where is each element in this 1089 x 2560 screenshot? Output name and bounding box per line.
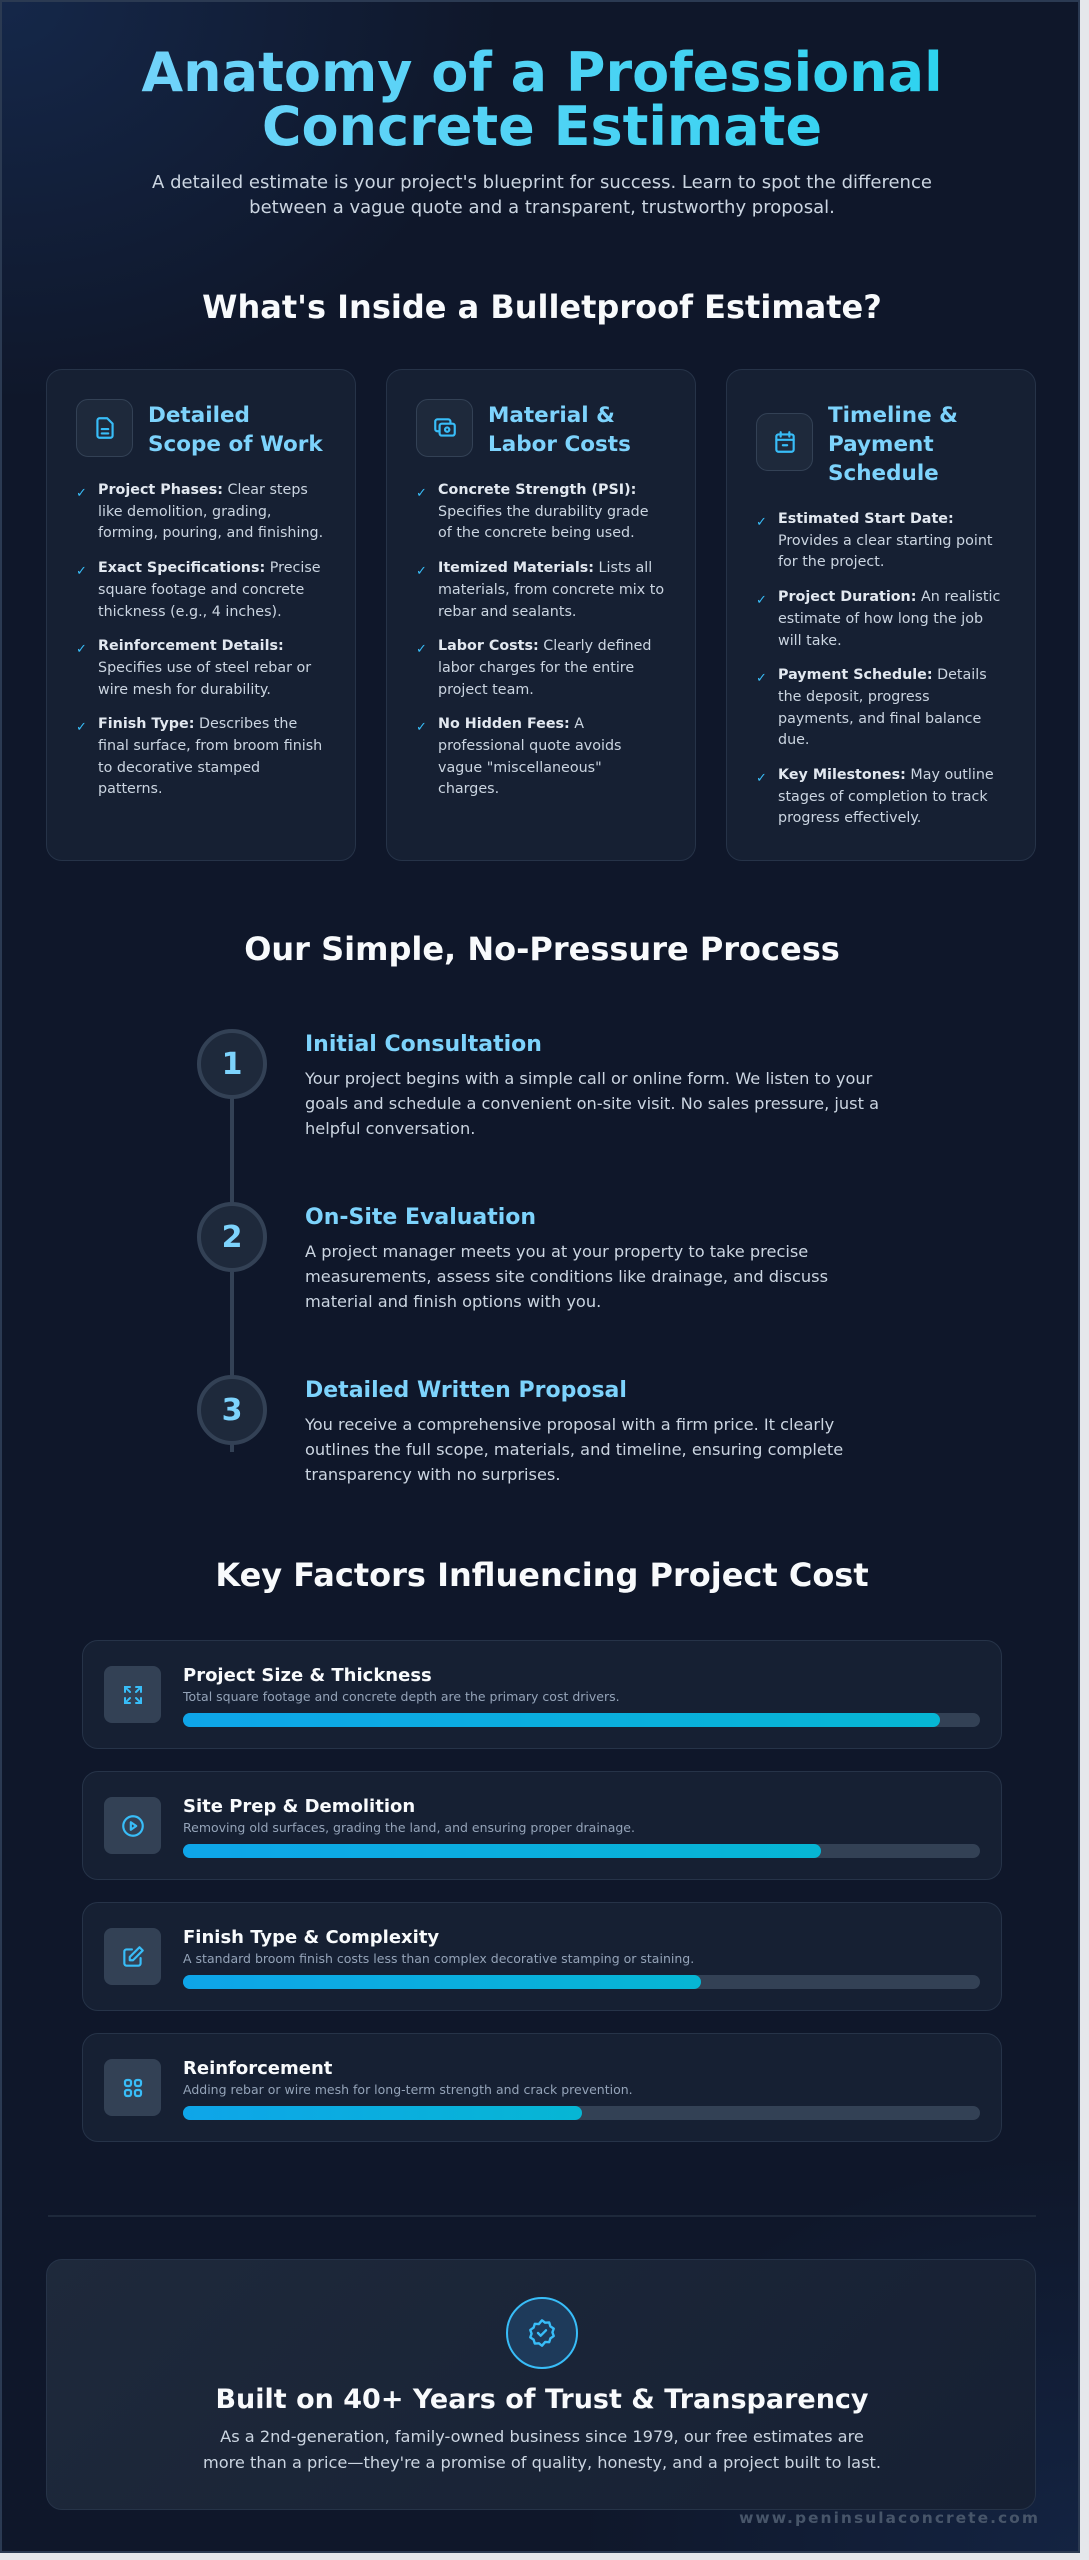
card title: Timeline & — [828, 403, 958, 428]
circle 1: 1 — [222, 1046, 242, 1082]
icon: document — [76, 399, 133, 457]
step 1 — [197, 1029, 879, 1138]
card title: Schedule — [828, 461, 939, 486]
factor: finish: Finish Type & Complexity — [183, 1927, 439, 1948]
callout title: Built on 40+ Years of Trust & Transparency — [215, 2384, 869, 2415]
card title: Labor Costs — [488, 432, 631, 457]
circle 2: 2 — [222, 1220, 242, 1254]
step 1 text: Initial Consultation — [305, 1032, 542, 1057]
title: Anatomy of a Professional — [141, 41, 943, 104]
factor: reinforcement — [82, 2033, 1002, 2142]
circle 3 — [197, 1375, 267, 1445]
circle 2 — [197, 1202, 267, 1272]
step 3 — [197, 1375, 843, 1484]
bullet list — [418, 482, 664, 797]
heading: process: Our Simple, No-Pressure Process — [244, 930, 840, 968]
factor: site prep: Site Prep & Demolition — [183, 1796, 415, 1817]
card title — [148, 403, 323, 457]
icon: play circle — [104, 1797, 161, 1854]
card title — [828, 403, 958, 486]
factor: size: Total square footage and concrete depth are the primary cost drivers. — [183, 1689, 620, 1704]
panel: trust callout — [46, 2259, 1036, 2510]
heading: what's inside: What's Inside a Bulletproof Estimate? — [202, 288, 882, 326]
bullet list: Labor Costs: Clearly defined labor charges for the entire project team. — [438, 638, 651, 698]
circle 3: 3 — [222, 1392, 242, 1428]
title: Concrete Estimate — [262, 95, 822, 158]
bullet list — [78, 482, 323, 797]
bar 65% — [183, 1975, 980, 1989]
icon: money — [416, 399, 473, 457]
card title — [488, 403, 631, 457]
icon: grid — [104, 2059, 161, 2116]
card title: Payment — [828, 432, 934, 457]
timeline line — [230, 1062, 234, 1452]
icon: badge check — [506, 2297, 578, 2369]
panel: material & labor — [386, 369, 696, 861]
bullet list: Itemized Materials: Lists all materials, from concrete mix to rebar and sealants. — [438, 560, 664, 620]
icon: expand — [104, 1666, 161, 1723]
step 3 text: You receive a comprehensive proposal with a firm price. It clearly outlines the full scope, materials, and timeline, ensuring complete transparency with no surprises. — [305, 1415, 843, 1484]
bullet list: Key Milestones: May outline stages of completion to track progress effectively. — [778, 767, 994, 826]
bullet list: Exact Specifications: Precise square footage and concrete thickness (e.g., 4 inches). — [98, 560, 321, 620]
icon: edit — [104, 1928, 161, 1985]
step 2 text: A project manager meets you at your property to take precise measurements, assess site conditions like drainage, and discuss material and finish options with you. — [305, 1242, 828, 1311]
bullet list: Reinforcement Details: Specifies use of steel rebar or wire mesh for durability. — [98, 638, 311, 698]
heading: key factors: Key Factors Influencing Project Cost — [215, 1556, 869, 1594]
card title: Material & — [488, 403, 615, 428]
step 3 text: Detailed Written Proposal — [305, 1378, 627, 1403]
bullet list — [758, 511, 1000, 826]
step 2 — [197, 1202, 828, 1311]
factor: size: Project Size & Thickness — [183, 1665, 432, 1686]
factor: site prep — [82, 1771, 1002, 1880]
bullet list: No Hidden Fees: A professional quote avoids vague "miscellaneous" charges. — [438, 716, 621, 797]
bullet list: Project Duration: An realistic estimate of how long the job will take. — [778, 589, 1000, 649]
step 3 text — [305, 1378, 843, 1484]
circle 1 — [197, 1029, 267, 1099]
panel: scope of work — [46, 369, 356, 861]
bullet list: Payment Schedule: Details the deposit, progress payments, and final balance due. — [778, 667, 987, 748]
factor: site prep: Removing old surfaces, grading the land, and ensuring proper drainage. — [183, 1820, 635, 1835]
callout text — [203, 2427, 881, 2472]
step 2 text: On-Site Evaluation — [305, 1205, 536, 1230]
bullet list: Project Phases: Clear steps like demolition, grading, forming, pouring, and finishing. — [98, 482, 323, 541]
factor: reinforcement: Adding rebar or wire mesh for long-term strength and crack prevention. — [183, 2082, 633, 2097]
title — [2, 46, 1082, 154]
factor: finish: A standard broom finish costs less than complex decorative stamping or staining. — [183, 1951, 694, 1966]
icon: calendar — [756, 413, 813, 471]
callout text: As a 2nd-generation, family-owned business since 1979, our free estimates are — [220, 2427, 864, 2446]
card title: Scope of Work — [148, 432, 323, 457]
bar 50% — [183, 2106, 980, 2120]
factor: finish — [82, 1902, 1002, 2011]
callout text: more than a price—they're a promise of quality, honesty, and a project built to last. — [203, 2453, 881, 2472]
card title: Detailed — [148, 403, 250, 428]
step 1 text — [305, 1032, 879, 1138]
factor: reinforcement: Reinforcement — [183, 2058, 332, 2079]
bullet list: Estimated Start Date: Provides a clear starting point for the project. — [778, 511, 993, 570]
panel: timeline & payment — [726, 369, 1036, 861]
factor: size — [82, 1640, 1002, 1749]
subtitle — [152, 172, 932, 218]
step 1 text: Your project begins with a simple call or online form. We listen to your goals and schedule a convenient on-site visit. No sales pressure, just a helpful conversation. — [305, 1069, 879, 1138]
subtitle: A detailed estimate is your project's blueprint for success. Learn to spot the difference — [152, 172, 932, 193]
bullet list: Concrete Strength (PSI): Specifies the durability grade of the concrete being used. — [438, 482, 649, 541]
bar 95% — [183, 1713, 980, 1727]
bullet list: Finish Type: Describes the final surface, from broom finish to decorative stamped patterns. — [98, 716, 322, 797]
subtitle: between a vague quote and a transparent, trustworthy proposal. — [249, 197, 835, 218]
bar 80% — [183, 1844, 980, 1858]
footer url: www.peninsulaconcrete.com — [739, 2509, 1040, 2527]
step 2 text — [305, 1205, 828, 1311]
